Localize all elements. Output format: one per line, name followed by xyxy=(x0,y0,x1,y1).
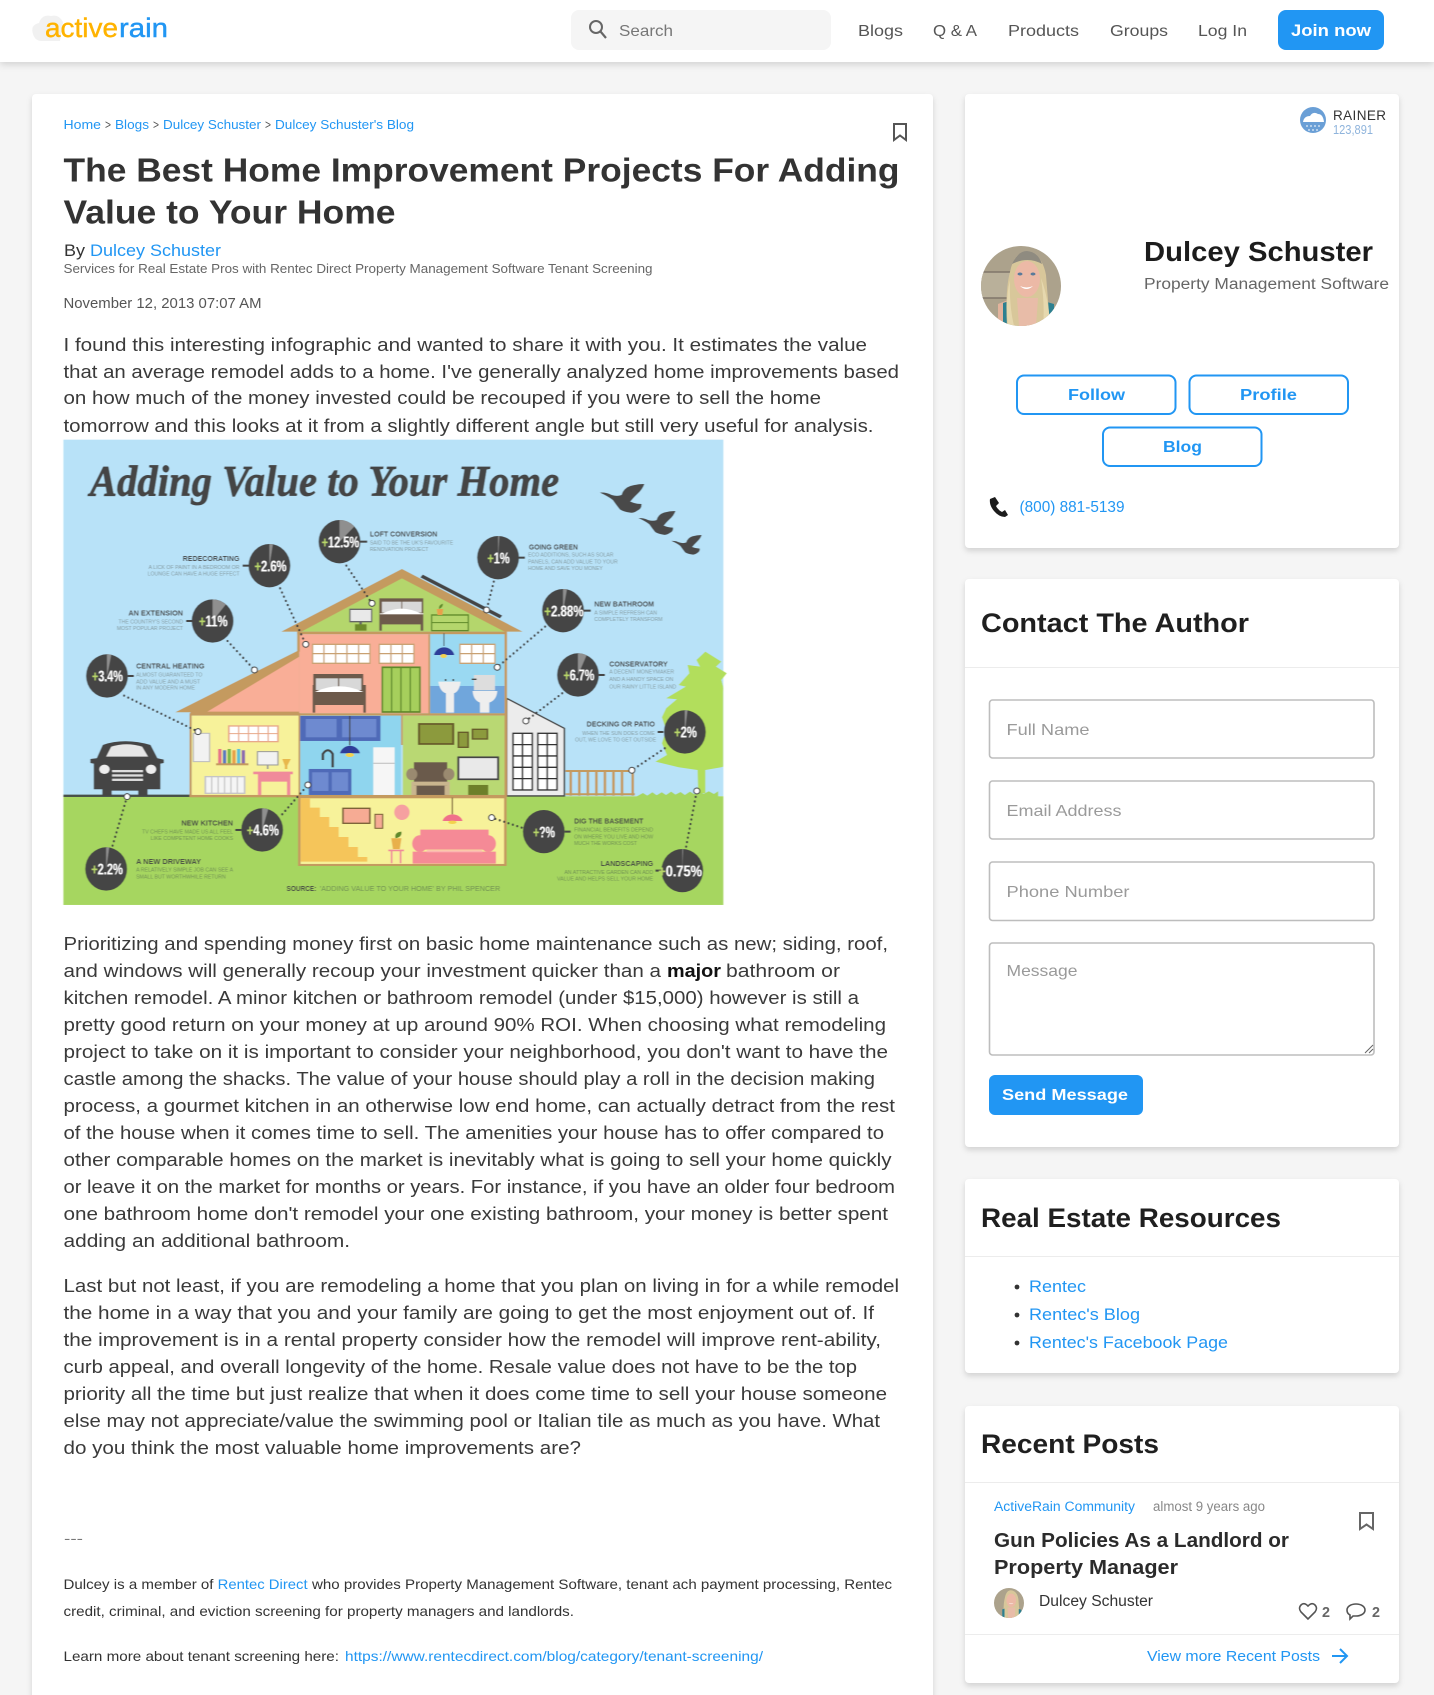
comments xyxy=(1347,1604,1380,1621)
callout: a new driveway: A NEW DRIVEWAY xyxy=(136,857,201,866)
grass edge xyxy=(637,791,718,798)
callout: new kitchen: NEW KITCHEN xyxy=(181,818,233,827)
callout: conservatory: CONSERVATORY xyxy=(609,660,668,668)
callout: central heating: +3.4% xyxy=(92,667,123,685)
callout: going green: +1% xyxy=(487,549,510,567)
likes xyxy=(1300,1604,1330,1621)
search box xyxy=(571,10,831,50)
author avatar xyxy=(981,246,1061,326)
callout: loft conversion: LOFT CONVERSION xyxy=(370,530,437,538)
rainer badge: RAINER xyxy=(1333,108,1386,123)
callout: a new driveway: +2.2% xyxy=(91,860,123,878)
view more link: View more Recent Posts xyxy=(1147,1648,1320,1665)
callout: dig the basement: ON WHERE YOU LIVE AND HOW xyxy=(574,834,653,840)
attic monitor xyxy=(350,609,372,622)
button: profile: Profile xyxy=(1240,387,1297,404)
rainer badge xyxy=(1300,107,1386,137)
byline: Dulcey Schuster xyxy=(90,241,221,260)
button: send message xyxy=(989,1075,1143,1115)
callout: new kitchen: LIKE COMPETENT HOME COOKS xyxy=(151,836,233,842)
basement xyxy=(299,797,505,865)
intro paragraph: on how much of the money invested could be recouped if you were to sell the home xyxy=(64,388,821,408)
rainer badge: 123,891 xyxy=(1333,123,1373,137)
body paragraph 3: priority all the time but just realize that when it does come time to sell your house someone xyxy=(64,1384,887,1404)
nav links: Groups xyxy=(1110,23,1168,40)
post meta: almost 9 years ago xyxy=(1153,1499,1265,1514)
body paragraph 2: or leave it on the market for months or years. For instance, if you have an older four bedroom xyxy=(64,1177,895,1197)
callout: conservatory: OUR RAINY LITTLE ISLAND xyxy=(609,684,677,690)
callout: new bathroom: +2.88% xyxy=(544,602,584,620)
byline: November 12, 2013 07:07 AM xyxy=(64,296,262,312)
upper bed xyxy=(313,674,366,713)
callout: new bathroom: COMPLETELY TRANSFORM xyxy=(594,617,663,623)
body paragraph 3: the improvement is in a rental property consider how the remodel will improve rent-ability, xyxy=(64,1330,881,1350)
callout: a new driveway xyxy=(85,847,234,891)
heading: Real Estate Resources xyxy=(981,1203,1281,1233)
resource links xyxy=(1015,1277,1228,1352)
author signature: who provides Property Management Software, tenant ach payment processing, Rentec xyxy=(311,1576,892,1592)
callout: conservatory xyxy=(557,653,677,697)
callout: redecorating: A LICK OF PAINT IN A BEDROOM OR xyxy=(148,565,240,571)
callout: an extension: AN EXTENSION xyxy=(128,609,183,617)
living room xyxy=(419,724,453,744)
callout: conservatory: A DECENT MONEYMAKER xyxy=(609,669,675,675)
roof xyxy=(281,569,522,632)
post title: Gun Policies As a Landlord or xyxy=(994,1529,1289,1552)
body paragraph 3: curb appeal, and overall longevity of the home. Resale value does not have to be the top xyxy=(64,1357,857,1377)
heading: Recent Posts xyxy=(981,1429,1159,1459)
intro paragraph: tomorrow and this looks at it from a slightly different angle but still very useful for analysis. xyxy=(64,416,874,436)
callout: dig the basement xyxy=(523,810,654,853)
infographic title: Adding Value to Your Home xyxy=(87,457,559,505)
input: phone xyxy=(990,862,1374,920)
resource links: Rentec's Blog xyxy=(1029,1305,1140,1324)
button: blog: Blog xyxy=(1163,439,1202,456)
body paragraph 2: kitchen remodel. A minor kitchen or bathroom remodel (under $15,000) however is still a xyxy=(64,988,860,1008)
breadcrumb: > xyxy=(105,117,111,132)
top navigation bar xyxy=(0,0,1434,62)
callout: new bathroom: NEW BATHROOM xyxy=(594,600,654,608)
dotted connectors xyxy=(113,566,700,847)
source line: 'ADDING VALUE TO YOUR HOME' BY PHIL SPENCER xyxy=(320,885,500,893)
attic dresser xyxy=(432,615,468,631)
callout: loft conversion: RENOVATION PROJECT xyxy=(370,547,429,553)
logo: activerain: rain xyxy=(119,13,168,43)
nav links: Q & A xyxy=(933,23,977,40)
body paragraph 3: Last but not least, if you are remodeling a home that you plan on living in for a while remodel xyxy=(64,1276,899,1296)
callout: going green: ECO ADDITIONS, SUCH AS SOLAR xyxy=(528,552,614,558)
house xyxy=(175,569,635,865)
author signature: --- xyxy=(64,1530,83,1546)
article title: The Best Home Improvement Projects For Adding xyxy=(64,152,900,188)
callout: landscaping xyxy=(557,849,703,892)
body paragraph 2: and windows will generally recoup your investment quicker than a xyxy=(64,961,662,981)
callout: loft conversion: SAID TO BE THE UK'S FAVOURITE xyxy=(370,540,453,546)
breadcrumb xyxy=(64,117,414,132)
panel: recent posts xyxy=(965,1406,1399,1683)
ground floor xyxy=(190,713,507,716)
nav links: Log In xyxy=(1198,23,1247,40)
body paragraph 2: process, a gourmet kitchen in an otherwise low end home, can actually detract from the rest xyxy=(64,1096,895,1116)
post title xyxy=(994,1529,1289,1579)
intro paragraph: that an average remodel adds to a home. I've generally analyzed home improvements based xyxy=(64,362,899,382)
logo: activerain xyxy=(32,13,168,43)
infographic: Adding Value to Your Home xyxy=(63,440,727,905)
body paragraph 2: one bathroom home don't remodel your one existing bathroom, your money is better spent xyxy=(64,1204,888,1224)
callout: central heating: ALMOST GUARANTEED TO xyxy=(136,672,203,678)
body paragraph 2 xyxy=(64,934,895,1251)
callout: landscaping: +0.75% xyxy=(658,862,702,880)
upper floor xyxy=(175,650,299,714)
post author avatar xyxy=(994,1588,1024,1618)
callout: conservatory: AND A HANDY SPACE ON xyxy=(609,677,673,683)
join now button xyxy=(1278,10,1384,50)
callout: landscaping: LANDSCAPING xyxy=(601,859,653,868)
callout: new kitchen: +4.6% xyxy=(247,821,279,839)
input: email: Email Address xyxy=(1006,803,1122,820)
article title: Value to Your Home xyxy=(64,194,396,230)
author signature: credit, criminal, and eviction screening for property managers and landlords. xyxy=(64,1603,574,1619)
decking xyxy=(566,771,635,796)
nav links: Products xyxy=(1008,23,1079,40)
callout: an extension: MOST POPULAR PROJECT xyxy=(117,626,183,632)
body paragraph 2: castle among the shacks. The value of your house should play a roll in the decision making xyxy=(64,1069,875,1089)
callout: decking or patio: +2% xyxy=(674,723,697,741)
callout: redecorating: LOUNGE CAN HAVE A HUGE EFFECT xyxy=(148,571,240,577)
tree xyxy=(655,652,727,793)
source line xyxy=(287,884,500,893)
author signature: https://www.rentecdirect.com/blog/category/tenant-screening/ xyxy=(345,1648,763,1664)
breadcrumb: > xyxy=(265,117,271,132)
extension xyxy=(507,698,564,796)
body paragraph 2: bathroom or xyxy=(726,961,840,981)
callout: an extension: THE COUNTRY'S SECOND xyxy=(119,619,184,625)
callout: landscaping: VALUE AND HELPS SELL YOUR HOME xyxy=(557,876,653,882)
callout: conservatory: +6.7% xyxy=(563,666,594,684)
nav links xyxy=(858,23,1247,40)
wardrobe xyxy=(382,667,420,712)
callout: central heating xyxy=(86,654,205,698)
callout: new kitchen: TV CHEFS HAVE MADE US ALL FEEL xyxy=(142,829,234,835)
comments: 2 xyxy=(1372,1605,1380,1621)
logo: activerain: active xyxy=(45,13,118,43)
article title xyxy=(64,152,900,230)
callout: an extension xyxy=(117,599,234,643)
phone xyxy=(990,497,1124,517)
search box: Search xyxy=(619,23,673,40)
breadcrumb: Home xyxy=(64,117,101,132)
input: message: Message xyxy=(1006,963,1078,980)
callout: going green xyxy=(477,536,618,579)
toilet xyxy=(474,675,495,690)
breadcrumb: Dulcey Schuster xyxy=(163,117,262,132)
callout: a new driveway: A RELATIVELY SIMPLE JOB CAN SEE A xyxy=(136,867,234,873)
breadcrumb: Dulcey Schuster's Blog xyxy=(275,117,414,132)
callout: loft conversion xyxy=(319,520,453,563)
icon: birds xyxy=(600,484,702,555)
sink xyxy=(438,682,461,713)
byline: Services for Real Estate Pros with Rentec Direct Property Management Software Tenant Screening xyxy=(64,262,653,276)
body paragraph 2: pretty good return on your money at up around 90% ROI. When choosing what remodeling xyxy=(64,1015,886,1035)
body paragraph 3: else may not appreciate/value the swimming pool or Italian tile as much as you have. What xyxy=(64,1411,880,1431)
button: send message: Send Message xyxy=(1002,1087,1128,1104)
join now button: Join now xyxy=(1291,22,1371,40)
likes: 2 xyxy=(1322,1605,1330,1621)
callout: decking or patio: WHEN THE SUN DOES COME xyxy=(582,731,655,737)
post meta: ActiveRain Community xyxy=(994,1499,1135,1514)
callout: redecorating xyxy=(148,544,290,587)
callout: redecorating: REDECORATING xyxy=(183,554,240,563)
yellow room xyxy=(229,726,278,742)
callout: central heating: IN ANY MODERN HOME xyxy=(136,685,195,691)
callout: central heating: CENTRAL HEATING xyxy=(136,661,205,670)
button: follow: Follow xyxy=(1068,387,1126,404)
byline: By xyxy=(64,241,86,260)
resource links: Rentec xyxy=(1029,1277,1087,1296)
button: profile xyxy=(1190,376,1348,414)
author subtitle: Property Management Software xyxy=(1144,276,1389,293)
bathroom lamp xyxy=(442,633,445,646)
panel: real estate resources xyxy=(965,1179,1399,1373)
callout: dig the basement: DIG THE BASEMENT xyxy=(574,816,644,825)
icon: bookmark xyxy=(1360,1513,1373,1529)
callout: dig the basement: MUCH THE WORKS COST xyxy=(574,841,637,847)
input: message xyxy=(990,943,1374,1055)
callout: loft conversion: +12.5% xyxy=(322,533,359,551)
sky and ground xyxy=(63,440,723,905)
callout: new bathroom: A SIMPLE REFRESH CAN xyxy=(594,610,657,616)
nav links: Blogs xyxy=(858,23,903,40)
icon: bookmark xyxy=(894,124,906,140)
callout: decking or patio: OUT, WE LOVE TO GET OUTSIDE xyxy=(575,737,656,743)
panel: author profile xyxy=(965,94,1399,548)
callout: landscaping: AN ATTRACTIVE GARDEN CAN ADD xyxy=(564,870,654,876)
callout: new bathroom xyxy=(542,589,663,632)
body paragraph 3: the home in a way that you and your family are going to get the most enjoyment out of. If xyxy=(64,1303,875,1323)
post title: Property Manager xyxy=(994,1556,1178,1579)
body paragraph 2: other comparable homes on the market is inevitably what is going to sell your home quickly xyxy=(64,1150,892,1170)
upper interior details xyxy=(313,598,497,713)
panel: contact the author xyxy=(965,579,1399,1147)
callout: central heating: ADD VALUE AND A MUST xyxy=(136,679,200,685)
body paragraph 2: Prioritizing and spending money first on basic home maintenance such as new; siding, roof, xyxy=(64,934,888,954)
body paragraph 3: do you think the most valuable home improvements are? xyxy=(64,1438,581,1458)
intro paragraph xyxy=(64,335,899,436)
button: blog xyxy=(1103,428,1262,466)
byline xyxy=(64,241,653,312)
post author name: Dulcey Schuster xyxy=(1039,1593,1153,1610)
callout: going green: HOME AND SAVE YOU MONEY xyxy=(528,566,603,572)
author signature: Rentec Direct xyxy=(218,1576,308,1592)
breadcrumb: > xyxy=(153,117,159,132)
author signature: Dulcey is a member of xyxy=(64,1576,214,1592)
body paragraph 2: adding an additional bathroom. xyxy=(64,1231,350,1251)
author signature xyxy=(64,1530,892,1664)
phone: (800) 881-5139 xyxy=(1020,499,1124,516)
source line: SOURCE: xyxy=(287,884,316,893)
callout: redecorating: +2.6% xyxy=(254,557,287,575)
input: full name xyxy=(990,700,1374,758)
upper windows xyxy=(313,644,495,663)
attic bed xyxy=(379,598,423,631)
callout: going green: PANELS, CAN ADD VALUE TO YOUR xyxy=(528,559,618,565)
panel: main article xyxy=(32,94,933,1695)
author name: Dulcey Schuster xyxy=(1144,236,1373,267)
callout: a new driveway: SMALL BUT WORTHWHILE RETURN xyxy=(136,874,226,880)
callout: going green: GOING GREEN xyxy=(529,542,578,551)
car xyxy=(90,741,164,796)
input: full name: Full Name xyxy=(1006,722,1090,739)
breadcrumb: Blogs xyxy=(115,117,150,132)
callout: dig the basement: FINANCIAL BENEFITS DEPEND xyxy=(574,827,654,833)
heading: Contact The Author xyxy=(981,608,1250,638)
button: follow xyxy=(1017,376,1176,414)
input: phone: Phone Number xyxy=(1006,884,1130,901)
callout: an extension: +11% xyxy=(199,612,228,630)
callout: dig the basement: +?% xyxy=(533,823,555,841)
resource links: Rentec's Facebook Page xyxy=(1029,1333,1228,1352)
body paragraph 3 xyxy=(64,1276,899,1458)
input: email xyxy=(990,781,1374,839)
kitchen xyxy=(300,716,381,741)
callout: decking or patio: DECKING OR PATIO xyxy=(587,720,655,728)
body paragraph 2: of the house when it comes time to sell. The amenities your house has to offer compared to xyxy=(64,1123,884,1143)
callout: new kitchen xyxy=(142,808,283,852)
body paragraph 2: project to take on it is important to consider your neighborhood, you don't want to have the xyxy=(64,1042,888,1062)
author signature: Learn more about tenant screening here: xyxy=(64,1648,339,1664)
intro paragraph: I found this interesting infographic and wanted to share it with you. It estimates the value xyxy=(64,335,867,355)
body paragraph 2: major xyxy=(667,961,721,981)
callout: decking or patio xyxy=(575,710,706,754)
post meta xyxy=(994,1499,1265,1514)
